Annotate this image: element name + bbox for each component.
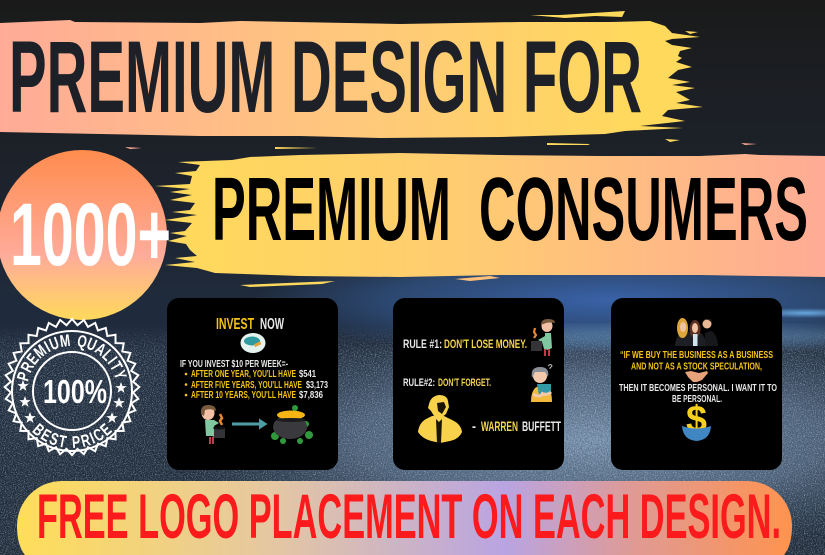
quote: yellow [620, 350, 773, 372]
seal text: best price [29, 421, 116, 453]
seal text: premium quality: Y [109, 368, 129, 382]
quote: white [619, 383, 777, 405]
list: savings: AFTER 10 YEARS, YOU'LL HAVE [191, 390, 296, 401]
seal text: premium quality [15, 332, 129, 383]
arrow [232, 418, 268, 430]
icon: dollar bowl: $ [686, 399, 707, 441]
list: savings [185, 369, 328, 401]
seal text: premium quality: A [91, 340, 109, 360]
badge: premium quality seal: 100% [43, 373, 107, 410]
icon: magician [531, 319, 555, 356]
text: rule 1: DON'T LOSE MONEY. [444, 337, 527, 351]
banner: premium consumers [155, 143, 825, 287]
card heading: INVEST [216, 316, 254, 333]
list: savings: $541 [299, 369, 316, 380]
icon: buffett portrait [418, 395, 462, 443]
text: attribution: WARREN [481, 418, 518, 434]
badge: 1000+ circle: 1000+ [10, 184, 171, 284]
seal text: premium quality: U [84, 335, 99, 356]
panel: warren buffett rules [393, 298, 564, 470]
seal text: premium quality: I [103, 354, 120, 368]
seal text: premium quality: M [59, 332, 71, 352]
seal text: best price: P [71, 434, 81, 453]
seal text: best price: E [37, 426, 54, 446]
icon: magician [201, 405, 226, 444]
quote: yellow: AND NOT AS A STOCK SPECULATION, [631, 362, 762, 372]
list: savings: AFTER ONE YEAR, YOU'LL HAVE [191, 369, 296, 380]
icon: thinking woman [531, 364, 552, 402]
list: savings: AFTER FIVE YEARS, YOU'LL HAVE [191, 380, 302, 391]
seal text: best price: B [29, 421, 47, 441]
icon: business people [675, 318, 718, 346]
seal text: best price: R [79, 431, 93, 452]
list: savings: $7,836 [299, 390, 323, 401]
seal text: best price: E [97, 421, 116, 440]
seal text: premium quality: Q [75, 332, 88, 352]
card heading: NOW [260, 316, 285, 333]
panel: business quote [611, 298, 782, 470]
text: intro line: IF YOU INVEST $10 PER WEEK=- [180, 359, 288, 370]
seal text: premium quality: P [15, 370, 34, 383]
icon: handshake [685, 371, 708, 382]
icon: pot of gold [271, 405, 313, 444]
text: attribution: BUFFETT [522, 418, 561, 434]
list: savings: $3,173 [306, 380, 328, 391]
banner: premium design for [0, 11, 703, 149]
seal text: premium quality: T [105, 359, 125, 374]
seal text: premium quality: I [42, 339, 54, 357]
icon: money cloud [240, 333, 266, 353]
text: attribution: - [472, 418, 476, 434]
seal text: best price: S [47, 430, 61, 450]
seal text: premium quality: E [24, 351, 43, 369]
text: rule 2: DON'T FORGET. [438, 377, 491, 389]
seal text: premium quality: L [98, 347, 116, 365]
seal text: premium quality: U [47, 334, 62, 355]
badge: 1000+ circle [0, 150, 171, 320]
text: rule 2: RULE#2: [403, 377, 435, 389]
panel: invest now [167, 298, 338, 470]
badge: premium quality seal [5, 319, 139, 455]
seal text: best price: I [87, 430, 98, 448]
seal text: best price: T [57, 433, 68, 452]
seal text: best price: C [90, 426, 108, 446]
seal text: premium quality: M [31, 342, 51, 363]
seal text: premium quality: R [18, 359, 39, 376]
text: rule 1: RULE #1: [403, 337, 442, 351]
quote: white: BE PERSONAL. [672, 394, 722, 405]
